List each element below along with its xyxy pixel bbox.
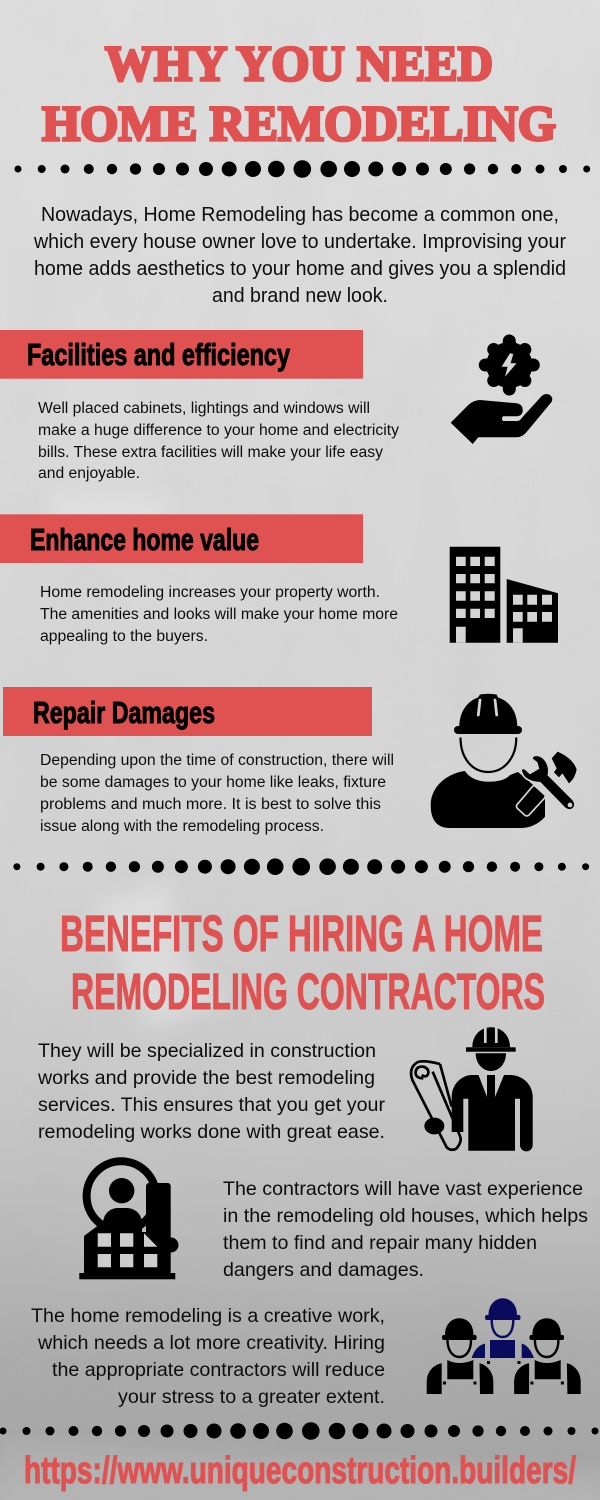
worker: left xyxy=(427,1318,493,1394)
intro text xyxy=(33,204,566,307)
text block: enhance xyxy=(40,584,398,645)
dotted divider top xyxy=(14,160,590,178)
text block: specialized: services. This ensures that you get your xyxy=(38,1094,386,1116)
text block: creativity: which needs a lot more creativity. Hiring xyxy=(37,1332,385,1354)
text block: experience: in the remodeling old houses, which helps xyxy=(223,1205,588,1227)
text block: enhance: The amenities and looks will make your home more xyxy=(40,606,398,623)
icon: worker with tools xyxy=(431,694,577,828)
worker: right xyxy=(514,1318,581,1394)
panel: repair damages xyxy=(3,687,577,835)
text block: experience xyxy=(223,1178,588,1281)
dotted divider middle xyxy=(13,858,589,876)
text block: repair: Depending upon the time of construction, there will xyxy=(40,752,394,769)
title: WHY YOU NEED xyxy=(105,35,493,91)
icon: buildings xyxy=(450,547,558,643)
title: HOME REMODELING xyxy=(42,95,556,151)
text block: enhance: appealing to the buyers. xyxy=(40,628,208,645)
icon: worker in building xyxy=(79,1161,178,1279)
text block: creativity: the appropriate contractors will reduce xyxy=(52,1359,385,1381)
intro text: Nowadays, Home Remodeling has become a common one, xyxy=(41,204,559,226)
text block: enhance: Home remodeling increases your property worth. xyxy=(40,584,380,601)
panel: benefit one xyxy=(37,1027,533,1151)
heading bar: repair: Repair Damages xyxy=(33,695,215,730)
text block: facilities: make a huge difference to your home and electricity xyxy=(38,422,399,439)
text block: facilities: and enjoyable. xyxy=(38,465,140,482)
icon: contractor with blueprint xyxy=(411,1027,533,1151)
text block: experience: The contractors will have vast experience xyxy=(223,1178,583,1200)
text block: specialized: remodeling works done with great ease. xyxy=(38,1121,385,1143)
text block: facilities: bills. These extra facilities will make your life easy xyxy=(38,444,383,461)
text block: facilities: Well placed cabinets, lightings and windows will xyxy=(38,400,370,417)
heading bar: facilities: Facilities and efficiency xyxy=(27,337,291,372)
text block: facilities xyxy=(38,400,399,482)
text block: creativity: The home remodeling is a creative work, xyxy=(31,1305,385,1327)
text block: repair xyxy=(40,752,394,835)
intro text: home adds aesthetics to your home and gives you a splendid xyxy=(34,258,566,280)
intro text: and brand new look. xyxy=(212,285,388,307)
title xyxy=(42,35,556,151)
panel: benefit three xyxy=(31,1298,581,1408)
worker: centre navy xyxy=(472,1298,534,1358)
text block: specialized xyxy=(37,1040,386,1143)
heading bar: enhance: Enhance home value xyxy=(30,522,259,557)
text block: repair: be some damages to your home like leaks, fixture xyxy=(40,774,386,791)
text block: experience: dangers and damages. xyxy=(223,1259,424,1281)
panel: benefit two xyxy=(79,1161,588,1281)
heading bar: enhance xyxy=(0,514,363,563)
text block: specialized: They will be specialized in construction xyxy=(38,1040,376,1062)
icon: gear over hand xyxy=(451,334,552,444)
icon: team of workers xyxy=(427,1298,581,1394)
text block: creativity xyxy=(31,1305,385,1408)
heading bar: repair xyxy=(3,687,372,736)
panel: facilities and efficiency xyxy=(0,330,552,482)
panel: enhance home value xyxy=(0,514,558,645)
text block: experience: them to find and repair many hidden xyxy=(223,1232,537,1254)
intro text: which every house owner love to undertake. Improvising your xyxy=(33,231,566,253)
heading: benefits xyxy=(60,905,545,1020)
text block: repair: issue along with the remodeling process. xyxy=(40,818,324,835)
text block: specialized: works and provide the best remodeling xyxy=(37,1067,375,1089)
heading bar: facilities xyxy=(0,330,363,379)
dotted divider bottom xyxy=(0,1422,598,1440)
text block: repair: problems and much more. It is best to solve this xyxy=(40,796,381,813)
text block: creativity: your stress to a greater extent. xyxy=(118,1386,385,1408)
